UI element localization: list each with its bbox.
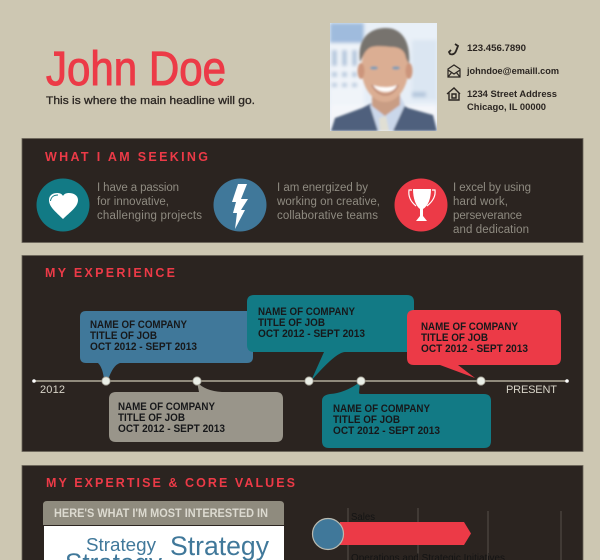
portrait photo xyxy=(330,23,437,131)
panel: what i am seeking xyxy=(22,138,583,242)
headline: This is where the main headline will go. xyxy=(46,95,255,107)
callout: teal job lower: TITLE OF JOB xyxy=(333,414,400,426)
callout: gray job: TITLE OF JOB xyxy=(118,412,185,424)
text: energized: working on creative, xyxy=(276,196,380,208)
icon: lightning bolt xyxy=(214,178,266,232)
callout: teal job upper: TITLE OF JOB xyxy=(258,317,325,329)
name title: John Doe xyxy=(46,43,226,96)
icon: trophy xyxy=(394,178,448,232)
text: excel: perseverance xyxy=(453,210,522,222)
callout: blue job: NAME OF COMPANY xyxy=(90,319,188,331)
icon: heart xyxy=(36,178,90,232)
callout: red job: NAME OF COMPANY xyxy=(421,321,519,333)
bar chart xyxy=(312,508,561,560)
callout: teal job upper: OCT 2012 - SEPT 2013 xyxy=(258,328,365,340)
word cloud header: HERE'S WHAT I'M MOST INTERESTED IN xyxy=(54,508,268,520)
callout: blue job: OCT 2012 - SEPT 2013 xyxy=(90,341,197,353)
marker circle xyxy=(312,518,344,550)
text: passion: for innovative, xyxy=(97,196,169,208)
callout: teal job lower: NAME OF COMPANY xyxy=(333,403,431,415)
word cloud words xyxy=(67,536,269,560)
bar: sales xyxy=(340,522,471,545)
address: 1234 Street Address xyxy=(467,89,557,100)
text: energized: collaborative teams xyxy=(277,210,378,222)
icon: house xyxy=(447,88,460,100)
timeline nodes xyxy=(102,377,485,385)
text: excel: and dedication xyxy=(453,224,529,236)
callout: teal job upper: NAME OF COMPANY xyxy=(258,306,356,318)
text: excel xyxy=(453,182,531,236)
address xyxy=(467,89,557,113)
callout: blue job: TITLE OF JOB xyxy=(90,330,157,342)
icon: envelope xyxy=(448,65,460,77)
word cloud box xyxy=(43,501,284,560)
label: sales: Sales xyxy=(351,512,375,523)
text: passion xyxy=(97,182,202,222)
callout: teal job upper xyxy=(247,295,414,381)
callout: gray job xyxy=(109,382,283,442)
icon: phone xyxy=(449,44,458,54)
callout: gray job: NAME OF COMPANY xyxy=(118,401,216,413)
heading: experience: MY EXPERIENCE xyxy=(45,266,175,280)
label: present: PRESENT xyxy=(506,384,557,396)
text: energized xyxy=(276,182,380,222)
callout: gray job: OCT 2012 - SEPT 2013 xyxy=(118,423,225,435)
email: johndoe@emaill.com xyxy=(466,66,559,77)
text: passion: challenging projects xyxy=(97,210,202,222)
panel: my experience xyxy=(22,256,583,452)
callout: blue job xyxy=(80,311,253,380)
callout: teal job lower: OCT 2012 - SEPT 2013 xyxy=(333,425,440,437)
callout: red job: TITLE OF JOB xyxy=(421,332,488,344)
panel: my expertise and core values xyxy=(22,466,583,560)
heading: expertise: MY EXPERTISE & CORE VALUES xyxy=(46,476,295,490)
contact details xyxy=(447,43,559,113)
phone number: 123.456.7890 xyxy=(467,43,526,54)
address: Chicago, IL 00000 xyxy=(467,102,546,113)
word cloud words: Strategy xyxy=(86,535,156,555)
heading: seeking: WHAT I AM SEEKING xyxy=(45,150,208,164)
text: energized: I am energized by xyxy=(277,182,368,194)
callout: red job: OCT 2012 - SEPT 2013 xyxy=(421,343,528,355)
callout: teal job lower xyxy=(322,382,491,448)
timeline axis xyxy=(32,379,569,383)
label: 2012: 2012 xyxy=(40,384,65,396)
callout: red job xyxy=(407,310,561,378)
text: excel: hard work, xyxy=(453,196,508,208)
text: excel: I excel by using xyxy=(453,182,531,194)
text: passion: I have a passion xyxy=(97,182,179,194)
